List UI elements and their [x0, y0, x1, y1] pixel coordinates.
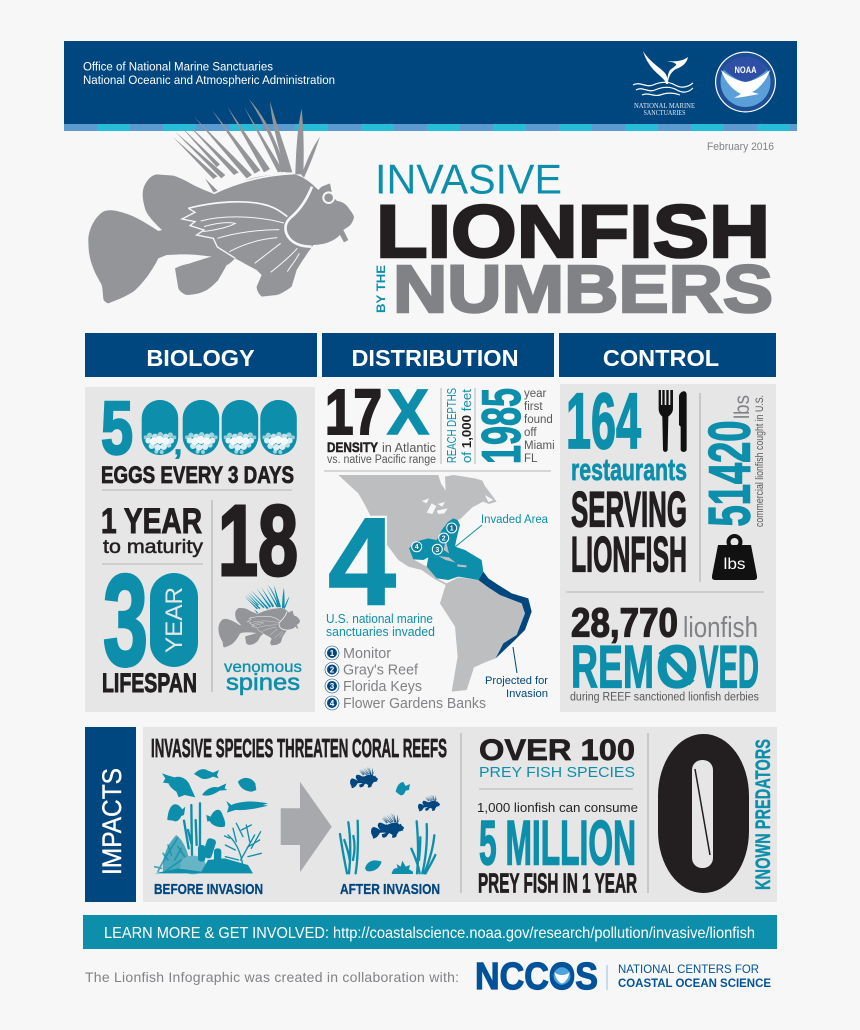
stat: 17X density: 17 [325, 376, 382, 448]
stat: 50,000 eggs: EGGS EVERY 3 DAYS [101, 462, 294, 489]
list: sanctuaries: Monitor [343, 646, 391, 662]
header organisation text: National Oceanic and Atmospheric Administration [83, 73, 335, 87]
column heading: distribution: DISTRIBUTION [351, 345, 519, 371]
stat: 50,000 eggs: , [174, 428, 182, 461]
stat: 1 year to maturity: to maturity [103, 537, 204, 558]
stat: 0 known predators: KNOWN PREDATORS [752, 739, 775, 890]
column heading: control [559, 333, 776, 377]
stat: 1985 first found: off [524, 427, 537, 439]
list: sanctuaries: Flower Gardens Banks [343, 696, 486, 712]
stat: 30 year lifespan: YEAR [161, 587, 188, 653]
stat: 4 sanctuaries: 4 [328, 493, 396, 632]
list: sanctuaries [325, 646, 486, 712]
title [375, 156, 773, 327]
map markers: 2 [442, 536, 446, 542]
impacts label: IMPACTS [97, 768, 127, 875]
stat: 164 restaurants serving lionfish: SERVING [571, 482, 687, 538]
stat: 28,770 lionfish removed: REM [571, 634, 654, 700]
label: after invasion: AFTER INVASION [340, 881, 440, 898]
logo: NCCOS: NATIONAL CENTERS FOR [618, 964, 759, 976]
stat: 18 venomous spines: venomous [224, 659, 302, 676]
stat: 50,000 eggs: 0 [144, 385, 176, 468]
stat: 28,770 lionfish removed: O [656, 634, 698, 700]
panel: biology [85, 385, 315, 712]
header banner [64, 41, 797, 131]
stat: 4 sanctuaries: 4 [328, 494, 396, 632]
stat: 50,000 eggs: 5 [101, 386, 133, 470]
stat: reach depths of 1,000 feet [445, 388, 474, 463]
banner: learn more [83, 915, 777, 949]
logo: national marine sanctuaries whale tail [633, 51, 695, 117]
stat: 1985 first found: Miami [524, 440, 555, 452]
list: sanctuaries: Gray's Reef [343, 662, 419, 678]
stat: 5 million prey fish: PREY FISH IN 1 YEAR [478, 868, 637, 898]
icon: weight: lbs [724, 556, 746, 573]
logo: NOAA seal [715, 52, 776, 112]
stat: 51420 lbs: lbs [731, 395, 754, 419]
panel: control: LIONFISH [571, 526, 687, 582]
stat: 4 sanctuaries: sanctuaries invaded [326, 625, 435, 639]
stat: 5 million prey fish: 5 MILLION [479, 808, 636, 878]
stat: 164 restaurants serving lionfish [566, 376, 687, 582]
stat: 28,770 lionfish removed: during REEF sanctioned lionfish derbies [570, 692, 759, 704]
stat: 1985 first found: year [524, 388, 547, 400]
stat: 1985 first found: first [524, 401, 543, 413]
list: sanctuaries: 2 [330, 666, 335, 674]
column heading: biology [85, 333, 317, 377]
illustration: reef before invasion [155, 769, 268, 874]
list: sanctuaries: 1 [330, 649, 335, 658]
stat: 17X density: X [387, 376, 429, 448]
logo: NCCOS [475, 956, 771, 998]
header organisation text: Office of National Marine Sanctuaries [83, 60, 273, 74]
stat: 50,000 eggs: 0 [185, 385, 217, 468]
stat: 4 sanctuaries: U.S. national marine [326, 612, 433, 626]
map markers [412, 523, 457, 554]
title: LIONFISH [376, 190, 770, 273]
icon: fork and knife [659, 390, 687, 452]
panel: impacts [143, 693, 777, 934]
stat: 28,770 lionfish removed: 28,770 [571, 600, 678, 646]
stat: 164 restaurants serving lionfish: restaurants [571, 452, 687, 487]
stat: over 100 prey fish species: PREY FISH SPECIES [479, 765, 635, 781]
stat: over 100 prey fish species [479, 734, 635, 781]
arrow: before to after [281, 782, 332, 872]
stat: 5 million prey fish: 1,000 lionfish can consume [477, 800, 638, 815]
header organisation text [83, 60, 335, 87]
date: February 2016 [707, 141, 774, 153]
panel: control [560, 376, 776, 712]
footer credit: The Lionfish Infographic was created in collaboration with: [85, 969, 459, 985]
column heading: control: CONTROL [603, 345, 719, 371]
stat: 5 million prey fish [477, 800, 638, 898]
heading: invasive species threaten coral reefs: INVASIVE SPECIES THREATEN CORAL REEFS [151, 735, 447, 763]
stat: 18 venomous spines: spines [226, 669, 300, 695]
callout: projected for invasion: Projected for [485, 675, 548, 687]
stat: 30 year lifespan: 0 [152, 548, 196, 691]
callout: invaded area: Invaded Area [481, 514, 549, 526]
stat: 17X density: in Atlantic [382, 441, 436, 455]
stat: 1985 first found: 1985 [470, 388, 532, 464]
stat: 0 known predators: 0 [662, 693, 746, 934]
logo: national marine sanctuaries whale tail: SANCTUARIES [644, 108, 686, 117]
stat: 28,770 lionfish removed [570, 600, 759, 704]
title: INVASIVE [375, 156, 562, 202]
icon: small lionfish [218, 585, 300, 647]
stat: 51420 lbs: commercial lionfish cought in U.S. [754, 395, 766, 527]
stat: 1985 first found [470, 388, 555, 465]
callout: projected for invasion: Invasion [506, 688, 548, 700]
stat: 164 restaurants serving lionfish: 164 [566, 376, 641, 465]
stat: over 100 prey fish species: OVER 100 [479, 734, 635, 767]
stat: 50,000 eggs: 0 [224, 385, 256, 468]
logo: national marine sanctuaries whale tail: NATIONAL MARINE [634, 101, 695, 110]
column heading: distribution [322, 333, 554, 377]
stat: 1985 first found: FL [524, 453, 538, 465]
stat: 50,000 eggs: 0 [262, 385, 294, 468]
stat: 51420 lbs: 51420 [698, 421, 762, 526]
illustration: reef after invasion [340, 767, 440, 874]
callout: invaded area [455, 514, 549, 547]
stat: reach depths of 1,000 feet: REACH DEPTHS [445, 388, 459, 463]
logo: NOAA seal: NOAA [734, 65, 757, 76]
stat: 28,770 lionfish removed: lionfish [683, 612, 758, 644]
stat: reach depths of 1,000 feet: of 1,000 feet [459, 389, 474, 463]
panel: control: VED [699, 634, 759, 700]
stat: 17X density [325, 376, 436, 466]
map markers: 4 [415, 544, 419, 551]
list: sanctuaries: 4 [330, 699, 335, 708]
stat: 18 venomous spines [218, 485, 302, 695]
stat: 30 year lifespan: LIFESPAN [102, 668, 197, 698]
stat: 17X density: DENSITY [327, 439, 379, 455]
stat: 30 year lifespan: 3 [103, 547, 148, 693]
label: before invasion: BEFORE INVASION [154, 881, 263, 898]
map markers: 3 [435, 547, 439, 554]
stat: 1985 first found: found [524, 414, 553, 426]
logo: NCCOS: COASTAL OCEAN SCIENCE [618, 976, 771, 990]
logo: NCCOS: NCCOS [475, 956, 598, 998]
stat: 50,000 eggs [101, 385, 297, 489]
stat: 17X density: vs. native Pacific range [327, 454, 436, 466]
callout: projected for invasion [485, 647, 548, 700]
list: sanctuaries: 3 [330, 682, 335, 691]
stat: 1 year to maturity [101, 502, 204, 558]
title: BY THE [376, 265, 388, 313]
stat: 4 sanctuaries [326, 493, 435, 639]
stat: 1 year to maturity: 1 YEAR [101, 502, 202, 541]
column heading: biology: BIOLOGY [146, 345, 255, 371]
list: sanctuaries: Florida Keys [343, 679, 422, 695]
map markers: 1 [450, 526, 454, 532]
map: the Americas with invaded range [338, 475, 532, 692]
title: NUMBERS [393, 252, 773, 327]
banner: learn more: LEARN MORE & GET INVOLVED: http://coastalscience.noaa.gov/research/pollution/invasive/lionfish [104, 925, 755, 942]
panel: distribution [324, 376, 555, 712]
icon: weight [712, 536, 757, 580]
stat: 18 venomous spines: 18 [218, 485, 298, 597]
icon: main lionfish silhouette [88, 99, 354, 303]
impacts label [85, 727, 136, 902]
